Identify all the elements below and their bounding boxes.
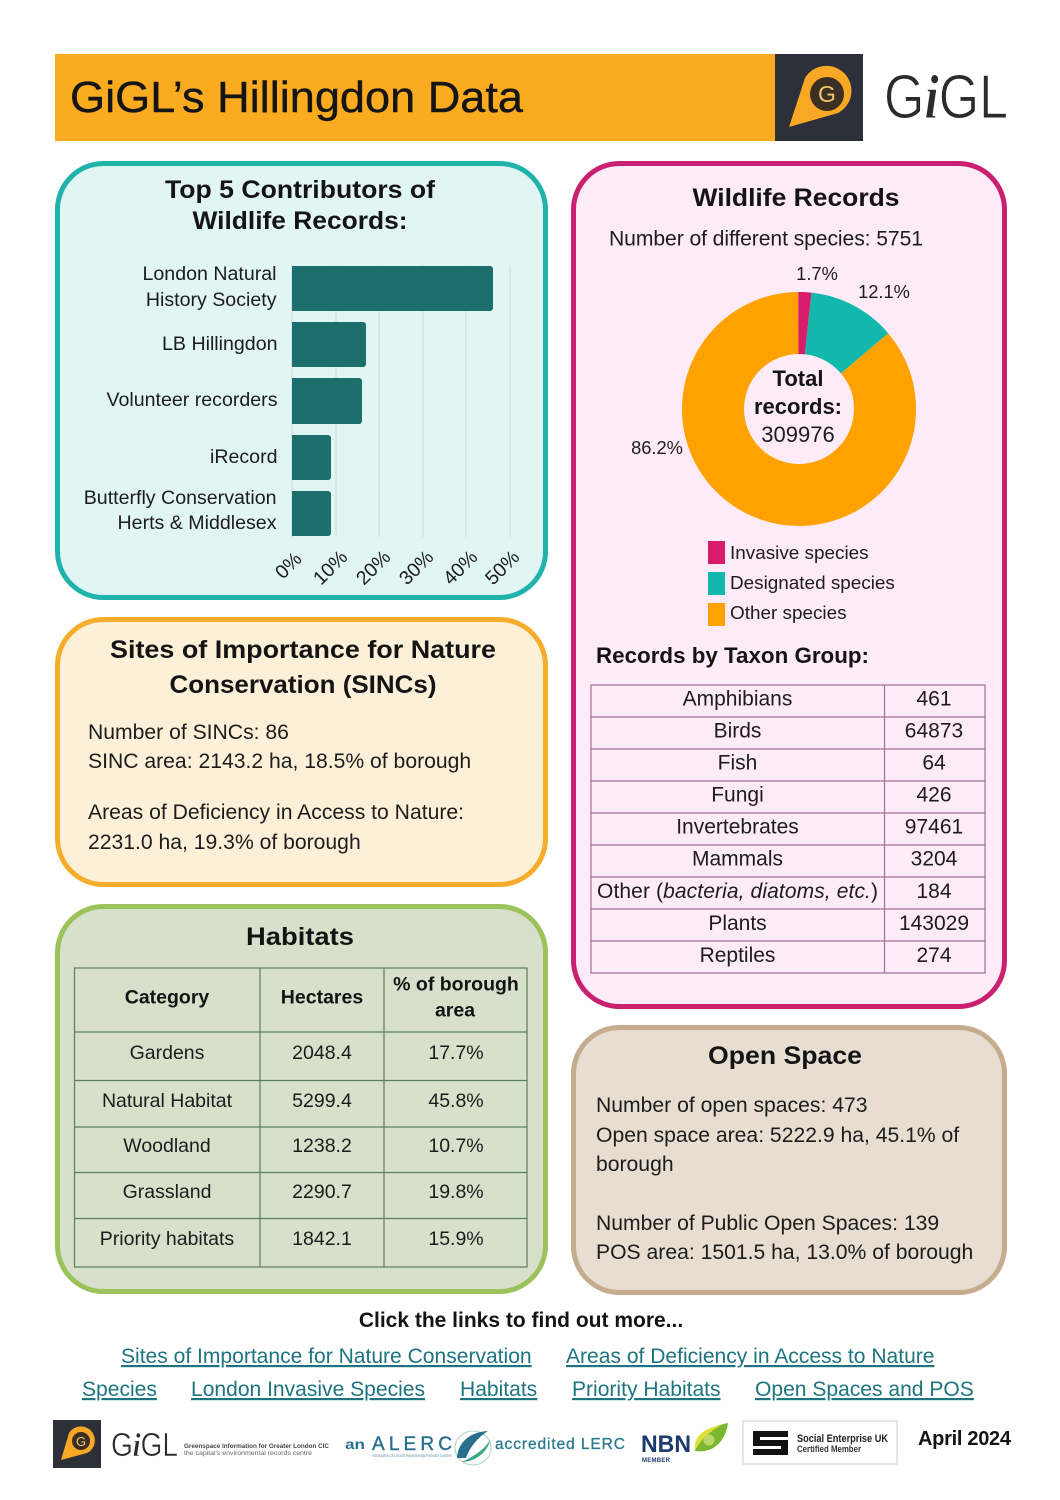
- table: habitats: Category: [125, 986, 209, 1008]
- table: taxon groups: Amphibians: [683, 688, 792, 710]
- text: open space figures: Number of open spaces: 473: [596, 1094, 867, 1117]
- table: habitats: 1842.1: [292, 1228, 352, 1250]
- table: habitats: Hectares: [281, 986, 363, 1008]
- panel: wildlife records: [574, 164, 1004, 1006]
- text: public open space figures: POS area: 1501.5 ha, 13.0% of borough: [596, 1241, 973, 1264]
- footer: NBN member logo: [641, 1423, 728, 1464]
- footer: Social Enterprise UK badge: [743, 1421, 897, 1464]
- links row 1: Areas of Deficiency in Access to Nature: [566, 1345, 934, 1368]
- table: habitats: 10.7%: [428, 1135, 484, 1157]
- text: SINC figures: SINC area: 2143.2 ha, 18.5% of borough: [88, 750, 471, 773]
- heading: SINCs: Sites of Importance for Nature: [110, 636, 496, 664]
- heading: top 5 contributors: Top 5 Contributors of: [165, 176, 436, 204]
- table: taxon groups: Fish: [718, 752, 757, 774]
- table: habitats: area: [435, 1000, 475, 1022]
- bar chart: contributors: Herts & Middlesex: [118, 512, 277, 534]
- table: taxon groups: 461: [916, 688, 952, 710]
- table: taxon groups: Reptiles: [700, 944, 775, 967]
- donut chart: species share: 12.1%: [858, 281, 910, 302]
- table: habitats: 45.8%: [428, 1090, 484, 1112]
- heading: wildlife records: Wildlife Records: [692, 184, 900, 212]
- footer: Social Enterprise UK badge: Certified Member: [797, 1444, 861, 1455]
- table: taxon groups: Mammals: [692, 848, 783, 870]
- heading: records by taxon group: Records by Taxon Group:: [596, 643, 869, 668]
- footer: GiGL logo: G: [76, 1434, 86, 1449]
- footer: GiGL logo: [53, 1420, 329, 1468]
- legend: species types: Designated species: [730, 573, 895, 594]
- bar chart: contributors: 30%: [395, 546, 438, 590]
- table: habitats: Priority habitats: [100, 1228, 234, 1250]
- table: habitats: Grassland: [123, 1181, 211, 1203]
- title: GiGL’s Hillingdon Data: [70, 73, 524, 122]
- links row 2: Habitats: [460, 1378, 537, 1401]
- donut chart: species share: 309976: [761, 422, 835, 447]
- table: habitats: 1238.2: [292, 1135, 352, 1157]
- text: open space figures: Open space area: 5222.9 ha, 45.1% of: [596, 1124, 959, 1147]
- text: date: April 2024: [918, 1428, 1012, 1450]
- text: areas of deficiency: Areas of Deficiency in Access to Nature:: [88, 801, 464, 824]
- text: species count: Number of different species: 5751: [609, 228, 923, 250]
- table: habitats: 5299.4: [292, 1090, 352, 1112]
- heading: open space: Open Space: [708, 1042, 862, 1070]
- text: links prompt: Click the links to find out more...: [359, 1309, 683, 1332]
- table: habitats: 2290.7: [292, 1181, 352, 1203]
- links row 1: [121, 1345, 934, 1368]
- panel: open space: [574, 1028, 1004, 1292]
- text: open space figures: [596, 1094, 959, 1176]
- footer: GiGL logo: Greenspace Information for Greater London CIC: [184, 1443, 329, 1450]
- bar chart: contributors: [84, 263, 524, 590]
- table: habitats: 15.9%: [428, 1228, 484, 1250]
- footer: ALERC accredited logo: accredited LERC: [495, 1436, 625, 1453]
- footer: GiGL logo: GiGL: [111, 1426, 178, 1464]
- bar chart: contributors: iRecord: [210, 446, 278, 468]
- table: taxon groups: Plants: [708, 912, 767, 935]
- table: taxon groups: Fungi: [711, 784, 764, 806]
- bar chart: contributors: 20%: [352, 546, 395, 590]
- links row 2: London Invasive Species: [191, 1378, 425, 1401]
- table: taxon groups: Invertebrates: [676, 816, 799, 838]
- heading: top 5 contributors: [165, 176, 436, 235]
- table: taxon groups: 64: [922, 752, 946, 774]
- icon: GiGL map pin logo: [775, 54, 863, 141]
- table: habitats: [74, 968, 527, 1267]
- text: areas of deficiency: 2231.0 ha, 19.3% of borough: [88, 831, 361, 854]
- donut chart: species share: records:: [754, 394, 842, 419]
- links row 2: Species: [82, 1378, 157, 1401]
- legend: species types: [708, 541, 895, 626]
- table: taxon groups: 184: [916, 880, 952, 903]
- text: areas of deficiency: [88, 801, 464, 854]
- table: taxon groups: 426: [916, 784, 952, 806]
- table: habitats: 17.7%: [428, 1042, 484, 1064]
- footer: NBN member logo: NBN: [641, 1431, 691, 1458]
- bar chart: contributors: London Natural: [142, 263, 276, 285]
- text: open space figures: borough: [596, 1153, 674, 1176]
- table: taxon groups: 64873: [905, 720, 963, 742]
- footer: GiGL logo: the capital's environmental records centre: [184, 1450, 312, 1457]
- bar chart: contributors: 10%: [309, 546, 352, 590]
- donut chart: species share: 1.7%: [796, 263, 838, 284]
- legend: species types: Other species: [730, 603, 847, 624]
- table: habitats: 2048.4: [292, 1042, 352, 1064]
- bar chart: contributors: Butterfly Conservation: [84, 487, 276, 509]
- links row 1: Sites of Importance for Nature Conservation: [121, 1345, 532, 1368]
- panel: SINCs: [58, 620, 546, 884]
- bar chart: contributors: LB Hillingdon: [162, 333, 278, 355]
- text: SINC figures: [88, 721, 471, 773]
- table: taxon groups: 143029: [899, 912, 969, 935]
- table: taxon groups: 274: [916, 944, 952, 967]
- legend: species types: Invasive species: [730, 543, 869, 564]
- table: taxon groups: 97461: [905, 816, 963, 838]
- table: habitats: Natural Habitat: [102, 1090, 233, 1112]
- table: taxon groups: Birds: [714, 720, 761, 742]
- table: taxon groups: [591, 685, 985, 973]
- heading: top 5 contributors: Wildlife Records:: [192, 207, 408, 235]
- donut chart: species share: [631, 263, 910, 495]
- footer: ALERC accredited logo: an: [345, 1436, 365, 1452]
- links row 2: Open Spaces and POS: [755, 1378, 974, 1401]
- donut chart: species share: 86.2%: [631, 437, 683, 458]
- header banner: [55, 54, 775, 141]
- bar chart: contributors: 0%: [271, 548, 306, 584]
- heading: SINCs: [110, 636, 496, 699]
- bar chart: contributors: Volunteer recorders: [106, 389, 278, 411]
- table: taxon groups: Other (bacteria, diatoms, etc.): [597, 880, 878, 903]
- table: habitats: 19.8%: [428, 1181, 484, 1203]
- panel: top 5 contributors: [58, 164, 546, 598]
- links row 2: Priority Habitats: [572, 1378, 721, 1401]
- heading: SINCs: Conservation (SINCs): [170, 671, 436, 699]
- donut chart: species share: Total: [773, 366, 823, 391]
- table: habitats: Woodland: [123, 1135, 211, 1157]
- table: habitats: Gardens: [130, 1042, 205, 1064]
- bar chart: contributors: History Society: [146, 289, 277, 311]
- table: habitats: % of borough: [393, 974, 519, 996]
- heading: habitats: Habitats: [246, 923, 354, 951]
- footer: ALERC accredited logo: [345, 1431, 625, 1465]
- text: public open space figures: Number of Public Open Spaces: 139: [596, 1212, 939, 1235]
- links row 2: [82, 1378, 974, 1401]
- footer: ALERC accredited logo: Association of Local Environmental Records Centres: [372, 1453, 453, 1458]
- text: public open space figures: [596, 1212, 973, 1264]
- table: taxon groups: 3204: [911, 848, 958, 870]
- panel: habitats: [58, 906, 546, 1292]
- icon: GiGL map pin logo: G: [818, 81, 836, 107]
- bar chart: contributors: 40%: [439, 546, 482, 590]
- footer: Social Enterprise UK badge: Social Enterprise UK: [797, 1433, 888, 1445]
- GiGL wordmark: GiGL: [884, 63, 1008, 132]
- footer: NBN member logo: MEMBER: [642, 1458, 671, 1464]
- text: SINC figures: Number of SINCs: 86: [88, 721, 289, 744]
- bar chart: contributors: 50%: [481, 546, 524, 590]
- footer: ALERC accredited logo: ALERC: [372, 1434, 452, 1455]
